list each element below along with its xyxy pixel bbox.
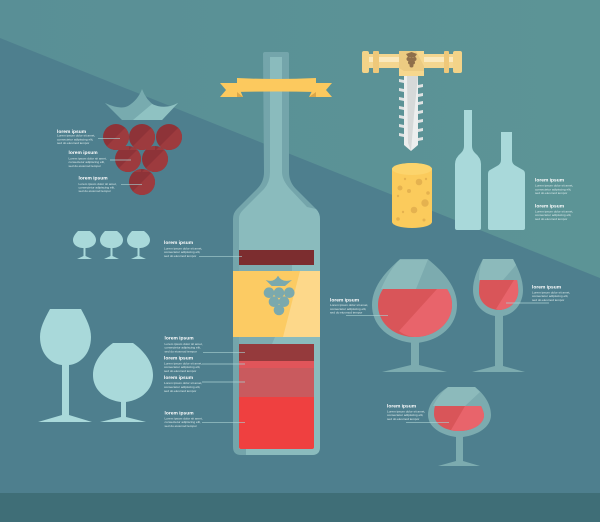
text: small glass callout: consectetur adipiscing elit, — [387, 413, 423, 417]
text: small glass callout: Lorem ipsum dolor sit amet, — [387, 410, 425, 414]
handle — [362, 51, 462, 76]
text: bottles callout 2: Lorem ipsum dolor sit amet, — [535, 210, 573, 214]
text: bottles callout 1: Lorem ipsum dolor sit amet, — [535, 184, 573, 188]
ribbon — [220, 78, 332, 97]
wine bottle — [233, 52, 320, 455]
text: bottles callout 2 — [535, 203, 573, 221]
text: large glass callout: lorem ipsum — [330, 297, 360, 303]
bottle label — [233, 271, 320, 337]
text: layer callout 3: consectetur adipiscing elit, — [164, 385, 200, 389]
text: tall glass callout: Lorem ipsum dolor sit amet, — [532, 290, 570, 294]
icon: grape crown — [105, 89, 178, 120]
text: small glasses callout: sed do eiusmod tempor — [164, 254, 196, 258]
text: grape callout 1: lorem ipsum — [57, 129, 87, 135]
text: grape callout 1: consectetur adipiscing elit, — [57, 137, 93, 141]
icon: small wine glass — [428, 387, 491, 466]
text: large glass callout: consectetur adipiscing elit, — [330, 307, 366, 311]
text: small glasses callout: consectetur adipiscing elit, — [164, 250, 200, 254]
text: layer callout 4: consectetur adipiscing elit, — [164, 420, 201, 424]
wine layers — [239, 344, 314, 449]
text: large glass callout: Lorem ipsum dolor sit amet, — [330, 303, 368, 307]
text: small glass callout: sed do eiusmod tempor — [387, 417, 419, 421]
wine band: top dark red — [239, 250, 314, 265]
icon: grape bunch — [103, 124, 182, 195]
text: layer callout 3: lorem ipsum — [164, 375, 194, 381]
text: small glass callout: lorem ipsum — [387, 403, 417, 409]
text: bottles callout 2: lorem ipsum — [535, 203, 565, 209]
icon: cork — [392, 163, 432, 228]
icon: label grapes — [264, 276, 295, 315]
text: grape callout 2: sed do eiusmod tempor — [68, 164, 101, 168]
icon: tall wine glass — [472, 259, 525, 372]
screw — [399, 76, 423, 151]
text: layer callout 2: Lorem ipsum dolor sit amet, — [164, 362, 202, 366]
text: layer callout 2 — [164, 355, 245, 373]
text: layer callout 2: consectetur adipiscing elit, — [164, 365, 200, 369]
text: small glasses callout: Lorem ipsum dolor sit amet, — [164, 246, 202, 250]
text: tall glass callout — [506, 284, 570, 303]
text: bottles callout 1 — [535, 178, 573, 195]
text: layer callout 1: sed do eiusmod tempor — [164, 350, 197, 354]
text: bottles callout 1: consectetur adipiscing elit, — [535, 188, 571, 192]
text: small glasses callout — [164, 240, 242, 258]
text: layer callout 2: lorem ipsum — [164, 355, 194, 361]
wine — [378, 289, 452, 337]
text: grape callout 2: Lorem ipsum dolor sit amet, — [68, 156, 107, 160]
text: grape callout 3: consectetur adipiscing elit, — [78, 186, 115, 190]
icon: tall empty glass — [38, 309, 92, 422]
text: small glasses callout: lorem ipsum — [164, 240, 194, 246]
text: grape callout 2 — [68, 150, 131, 168]
text: layer callout 4: lorem ipsum — [164, 410, 194, 416]
icon: tall bottle silhouette — [455, 110, 481, 230]
text: layer callout 1: Lorem ipsum dolor sit amet, — [164, 342, 203, 346]
text: bottles callout 2: sed do eiusmod tempor — [535, 217, 567, 221]
text: bottles callout 1: lorem ipsum — [535, 178, 565, 184]
text: layer callout 1 — [164, 336, 245, 354]
text: layer callout 3 — [164, 375, 245, 393]
text: grape callout 2: lorem ipsum — [68, 150, 98, 156]
text: tall glass callout: consectetur adipiscing elit, — [532, 294, 568, 298]
text: bottles callout 1: sed do eiusmod tempor — [535, 191, 567, 195]
text: tall glass callout: sed do eiusmod tempor — [532, 298, 564, 302]
icon: balloon empty glass — [93, 343, 153, 422]
text: grape callout 1: sed do eiusmod tempor — [57, 141, 89, 145]
icon: large wine glass — [372, 259, 457, 372]
wine — [434, 406, 484, 431]
icon: three small glasses — [73, 231, 150, 259]
text: layer callout 1: lorem ipsum — [164, 336, 194, 342]
text: bottles callout 2: consectetur adipiscing elit, — [535, 213, 571, 217]
text: layer callout 4: sed do eiusmod tempor — [164, 424, 197, 428]
text: layer callout 4: Lorem ipsum dolor sit amet, — [164, 416, 203, 420]
icon: corkscrew — [362, 51, 462, 151]
text: large glass callout: sed do eiusmod tempor — [330, 311, 362, 315]
text: tall glass callout: lorem ipsum — [532, 284, 562, 290]
text: layer callout 1: consectetur adipiscing elit, — [164, 346, 201, 350]
text: grape callout 3 — [78, 176, 142, 193]
text: grape callout 3: Lorem ipsum dolor sit amet, — [78, 182, 117, 186]
icon: short bottle silhouette — [488, 132, 525, 230]
text: grape callout 1 — [57, 129, 120, 145]
text: layer callout 4 — [164, 410, 245, 428]
text: layer callout 3: sed do eiusmod tempor — [164, 389, 196, 393]
text: grape callout 1: Lorem ipsum dolor sit amet, — [57, 134, 95, 138]
icon: handle grape — [406, 52, 417, 68]
wine — [479, 280, 518, 310]
text: large glass callout — [330, 297, 388, 316]
text: layer callout 2: sed do eiusmod tempor — [164, 369, 196, 373]
text: grape callout 3: sed do eiusmod tempor — [78, 189, 111, 193]
text: small glass callout — [387, 403, 449, 423]
text: grape callout 2: consectetur adipiscing elit, — [68, 160, 105, 164]
text: layer callout 3: Lorem ipsum dolor sit amet, — [164, 381, 202, 385]
text: grape callout 3: lorem ipsum — [78, 176, 108, 182]
